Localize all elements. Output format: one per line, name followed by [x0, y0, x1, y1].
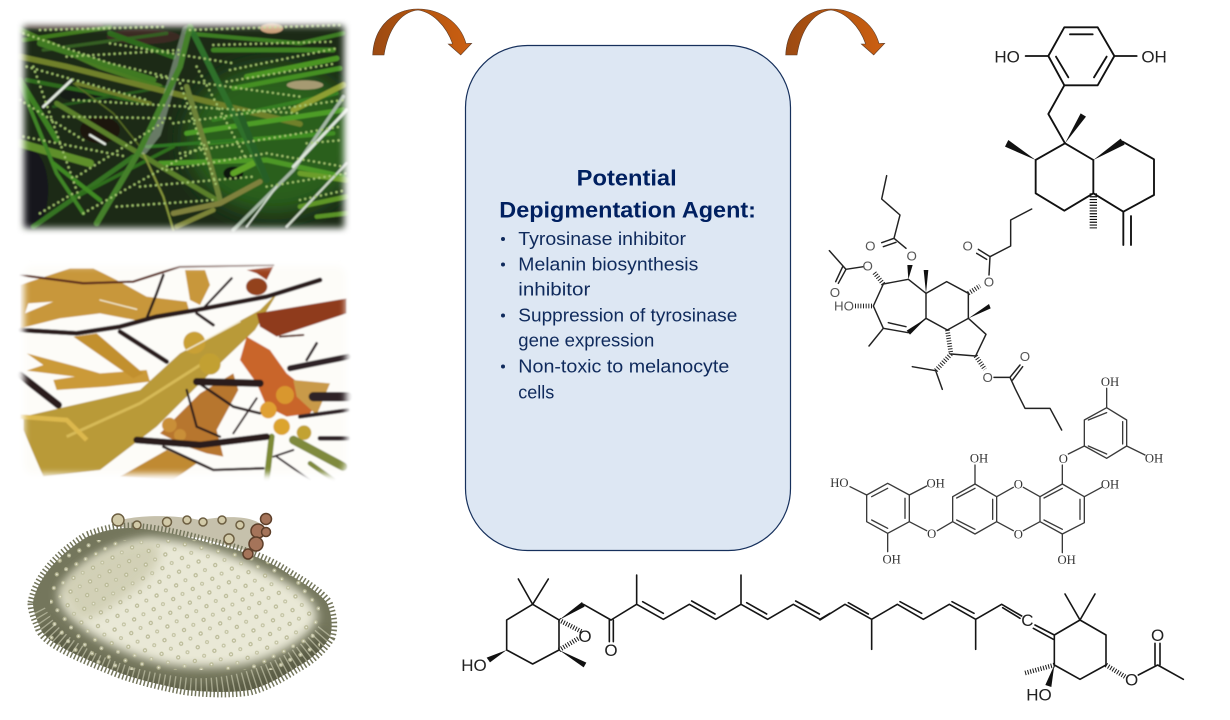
molecule: fucoxanthin right half: C: [1021, 611, 1033, 630]
photo: brown-yellow seaweed: [13, 260, 357, 483]
photo: sea cucumber: [30, 514, 340, 700]
molecule: diterpene ester: O: [984, 274, 994, 289]
molecule: diterpene ester: [829, 176, 1062, 430]
molecule: eckol phlorotannin: [830, 375, 1163, 567]
molecule: diterpene ester: O: [906, 248, 917, 263]
molecule: diterpene ester: O: [1020, 349, 1030, 364]
bullet list: Non-toxic to melanocyte: [518, 357, 729, 377]
molecule: eckol phlorotannin: OH: [1101, 477, 1119, 491]
bullet list: cells: [518, 382, 554, 402]
molecule: eckol phlorotannin: OH: [970, 452, 988, 466]
molecule: fucoxanthin right half: HO: [1026, 685, 1052, 704]
bullet list: Melanin biosynthesis: [518, 255, 698, 275]
molecule: diterpene ester: O: [962, 238, 973, 253]
molecule: eckol phlorotannin: OH: [927, 477, 945, 491]
molecule: eckol phlorotannin: O: [927, 527, 936, 541]
molecule: eckol phlorotannin: O: [1014, 478, 1023, 492]
heading: Depigmentation Agent:: [499, 198, 756, 223]
molecule: eckol phlorotannin: OH: [883, 553, 901, 567]
heading: Potential: [577, 166, 677, 191]
molecule: meroterpenoid hydroquinone: HO: [994, 48, 1020, 67]
bullet list: Tyrosinase inhibitor: [518, 229, 686, 249]
arrow: seaweed to agent: [373, 9, 472, 55]
molecule: diterpene ester: O: [830, 285, 840, 300]
molecule: diterpene ester: HO: [834, 299, 854, 314]
arrow: agent to compounds: [786, 9, 885, 55]
panel: potential depigmentation agent: [466, 46, 790, 550]
molecule: eckol phlorotannin: OH: [1058, 553, 1076, 567]
molecule: fucoxanthin left half: O: [578, 627, 592, 646]
molecule: eckol phlorotannin: HO: [830, 476, 848, 490]
bullet list: Suppression of tyrosinase: [518, 306, 737, 326]
molecule: fucoxanthin left half: HO: [461, 656, 487, 675]
molecule: eckol phlorotannin: OH: [1101, 375, 1119, 389]
molecule: eckol phlorotannin: OH: [1145, 452, 1163, 466]
molecule: diterpene ester: O: [982, 370, 993, 385]
molecule: fucoxanthin left half: O: [604, 641, 618, 660]
photo: green seagrass: [12, 17, 360, 237]
molecule: eckol phlorotannin: O: [1059, 452, 1068, 466]
molecule: meroterpenoid hydroquinone: OH: [1141, 48, 1167, 67]
molecule: fucoxanthin right half: O: [1151, 626, 1164, 645]
bullet list: inhibitor: [518, 280, 590, 300]
molecule: eckol phlorotannin: O: [1014, 528, 1023, 542]
molecule: diterpene ester: O: [862, 259, 873, 274]
bullet list: gene expression: [518, 331, 654, 351]
molecule: meroterpenoid hydroquinone: [994, 27, 1167, 245]
molecule: fucoxanthin left half: [461, 575, 830, 675]
bullet list: [501, 229, 737, 402]
molecule: diterpene ester: O: [865, 239, 876, 254]
molecule: fucoxanthin right half: O: [1125, 670, 1138, 689]
molecule: fucoxanthin right half: [820, 594, 1183, 704]
heading: [499, 166, 756, 223]
